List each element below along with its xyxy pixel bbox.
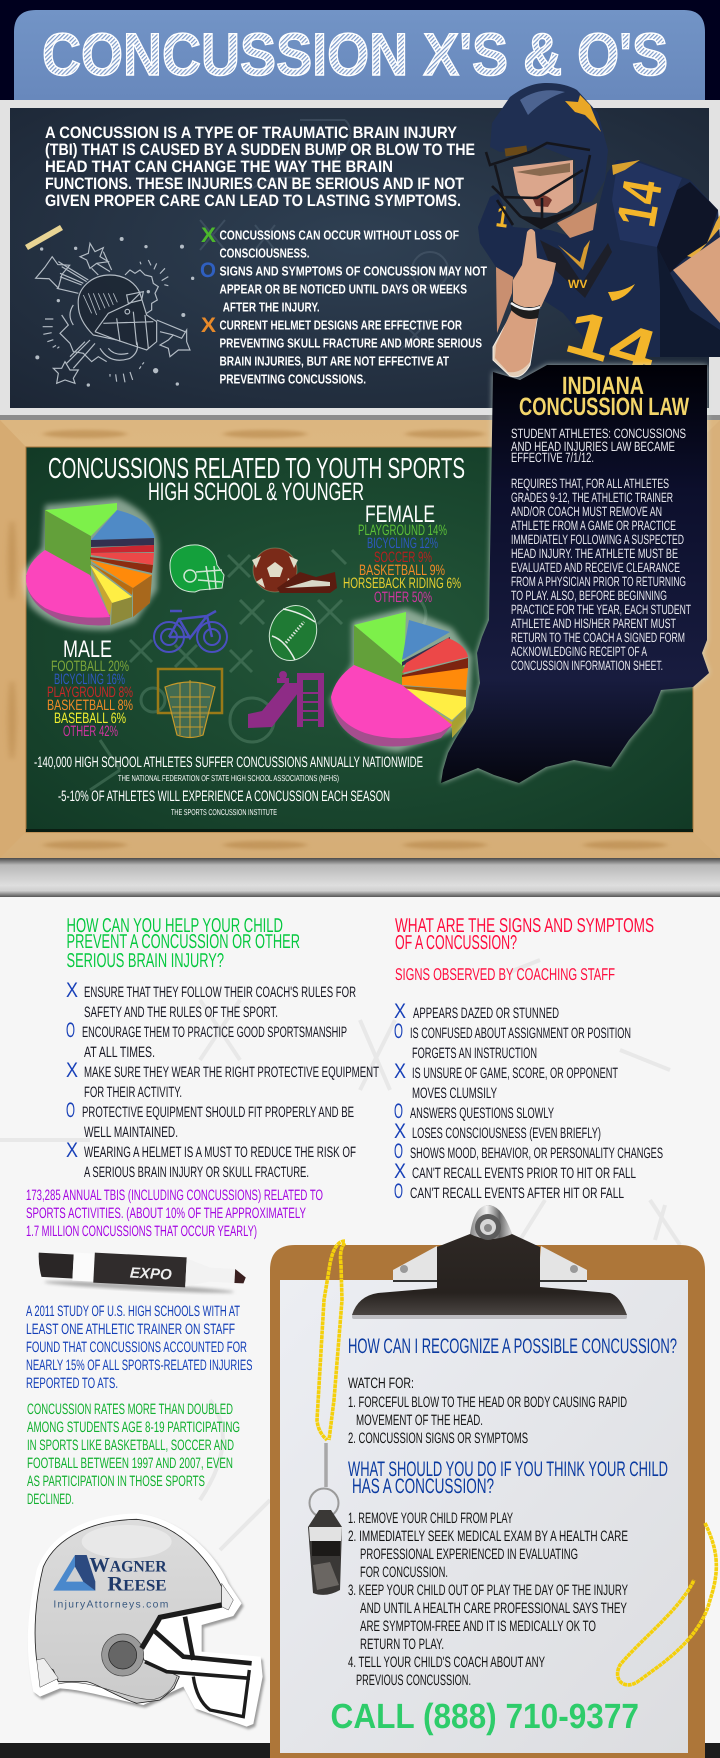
logo: Wagner Reese helmet [28, 1513, 265, 1729]
icon: chalk stick [25, 225, 63, 250]
action list: ARE SYMPTOM-FREE AND IT IS MEDICALLY OK TO [360, 1618, 596, 1635]
icon: football helmet [170, 545, 224, 592]
panel: whiteboard [0, 897, 720, 1758]
icon: american football [262, 599, 324, 667]
symptoms list: CAN'T RECALL EVENTS AFTER HIT OR FALL [410, 1185, 624, 1202]
prevention list: X [66, 1059, 78, 1082]
prevention list: SAFETY AND THE RULES OF THE SPORT. [84, 1004, 278, 1021]
prevention list: WEARING A HELMET IS A MUST TO REDUCE THE RISK OF [84, 1144, 356, 1161]
study statistic: NEARLY 15% OF ALL SPORTS-RELATED INJURIES [26, 1357, 252, 1374]
female legend [343, 522, 461, 606]
prevention list: FOR THEIR ACTIVITY. [84, 1084, 182, 1101]
recognition list: MOVEMENT OF THE HEAD. [356, 1412, 483, 1429]
football player: 14 [558, 297, 664, 388]
study statistic: A 2011 STUDY OF U.S. HIGH SCHOOLS WITH AT [26, 1303, 240, 1320]
intro bullet text: CURRENT HELMET DESIGNS ARE EFFECTIVE FOR [220, 317, 462, 332]
prevention list: O [66, 1019, 75, 1042]
football player: WV [568, 277, 587, 291]
action list: PREVIOUS CONCUSSION. [356, 1672, 471, 1689]
concussion rate statistic: AS PARTICIPATION IN THOSE SPORTS [27, 1473, 205, 1490]
intro bullet text: CONCUSSIONS CAN OCCUR WITHOUT LOSS OF [220, 227, 459, 242]
prevention list: MAKE SURE THEY WEAR THE RIGHT PROTECTIVE EQUIPMENT [84, 1064, 379, 1081]
face [513, 160, 573, 213]
concussion rate statistic: IN SPORTS LIKE BASKETBALL, SOCCER AND [27, 1437, 234, 1454]
concussion rate statistic: AMONG STUDENTS AGE 8-19 PARTICIPATING [27, 1419, 240, 1436]
concussion rate statistic [27, 1401, 240, 1508]
action list: 1. REMOVE YOUR CHILD FROM PLAY [348, 1510, 513, 1527]
male legend [47, 658, 133, 740]
faint erased marks [0, 960, 680, 1550]
football player: 1 [494, 200, 511, 235]
title: CONCUSSION X'S & O'S [42, 21, 668, 88]
prevention list: A SERIOUS BRAIN INJURY OR SKULL FRACTURE. [84, 1164, 309, 1181]
heading: what should you do [348, 1458, 668, 1498]
heading: how can you help: HOW CAN YOU HELP YOUR CHILD [66, 915, 283, 937]
prevention list: X [66, 1139, 78, 1162]
concussion rate statistic: FOOTBALL BETWEEN 1997 AND 2007, EVEN [27, 1455, 233, 1472]
whistle on yellow lanyard [308, 1241, 716, 1685]
law heading: INDIANA [562, 372, 644, 400]
call to action phone number: CALL (888) 710-9377 [330, 1697, 639, 1736]
intro bullet text: BRAIN INJURIES, BUT ARE NOT EFFECTIVE AT [220, 353, 449, 368]
symptoms list: X [394, 1120, 406, 1143]
header banner [14, 10, 705, 100]
purple TBI statistic: SPORTS ACTIVITIES. (ABOUT 10% OF THE APPROXIMATELY [26, 1205, 306, 1222]
bullet: green X: X [201, 224, 216, 247]
symptoms list: APPEARS DAZED OR STUNNED [413, 1005, 559, 1022]
heading: how can you help: SERIOUS BRAIN INJURY? [66, 950, 224, 972]
female legend: HORSEBACK RIDING 6% [343, 575, 461, 592]
female label: FEMALE [365, 501, 435, 528]
logo: Wagner Reese helmet: InjuryAttorneys.com [53, 1598, 168, 1610]
statistic: annual concussions [34, 754, 423, 783]
intro bullet text: CONSCIOUSNESS. [220, 245, 310, 260]
symptoms list: O [394, 1180, 403, 1203]
panel: Indiana law outline [441, 365, 709, 783]
purple TBI statistic: 173,285 ANNUAL TBIS (INCLUDING CONCUSSIONS) RELATED TO [26, 1187, 323, 1204]
intro text: (TBI) THAT IS CAUSED BY A SUDDEN BUMP OR BLOW TO THE [45, 141, 475, 159]
female legend: BICYCLING 12% [367, 535, 438, 552]
symptoms list: O [394, 1020, 403, 1043]
study statistic [26, 1303, 252, 1392]
female legend: SOCCER 9% [374, 549, 432, 566]
female legend: BASKETBALL 9% [359, 562, 445, 579]
law heading [519, 372, 689, 421]
bullet: orange X: X [201, 314, 216, 337]
panel: clipboard [270, 1245, 705, 1758]
panel: green chalkboard with wood frame [0, 420, 720, 858]
male legend: FOOTBALL 20% [51, 658, 129, 675]
icon: chalk helmet drawing [34, 237, 194, 387]
action list: RETURN TO PLAY. [360, 1636, 444, 1653]
action list: FOR CONCUSSION. [360, 1564, 448, 1581]
intro bullet text: PREVENTING CONCUSSIONS. [220, 371, 366, 386]
symptoms list: ANSWERS QUESTIONS SLOWLY [410, 1105, 554, 1122]
statistic: per season [58, 788, 390, 817]
panel: chalkboard intro [0, 100, 720, 420]
chart title [48, 453, 465, 506]
prevention list [66, 979, 379, 1181]
action list [348, 1510, 628, 1689]
chart title: CONCUSSIONS RELATED TO YOUTH SPORTS [48, 453, 465, 485]
heading: signs and symptoms: OF A CONCUSSION? [395, 932, 517, 954]
symptoms list: O [394, 1140, 403, 1163]
symptoms list [394, 1000, 663, 1203]
intro text: GIVEN PROPER CARE CAN LEAD TO LASTING SYMPTOMS. [45, 192, 461, 210]
logo: Wagner Reese helmet: WAGNER [89, 1554, 167, 1576]
intro bullet text: PREVENTING SKULL FRACTURE AND MORE SERIOUS [220, 335, 482, 350]
intro bullet text: APPEAR OR BE NOTICED UNTIL DAYS OR WEEKS [220, 281, 467, 296]
neck and collar [557, 203, 597, 238]
male legend: OTHER 42% [63, 723, 118, 740]
symptoms list: FORGETS AN INSTRUCTION [412, 1045, 537, 1062]
prevention list: X [66, 979, 78, 1002]
law text: EFFECTIVE 7/1/12. [511, 450, 594, 465]
icon: soccer ball and cleat [252, 548, 337, 593]
heading: signs and symptoms [395, 915, 654, 984]
chart title: HIGH SCHOOL & YOUNGER [148, 478, 364, 506]
statistic: annual concussions: -140,000 HIGH SCHOOL ATHLETES SUFFER CONCUSSIONS ANNUALLY NATIONWIDE [34, 754, 423, 771]
prevention list: PROTECTIVE EQUIPMENT SHOULD FIT PROPERLY AND BE [82, 1104, 354, 1121]
icon: playground slide [248, 671, 324, 728]
intro bullet text: AFTER THE INJURY. [223, 299, 320, 314]
symptoms list: X [394, 1160, 406, 1183]
intro bullet text: SIGNS AND SYMPTOMS OF CONCUSSION MAY NOT [220, 263, 487, 278]
symptoms list: X [394, 1000, 406, 1023]
logo: Wagner Reese helmet: REESE [107, 1573, 167, 1595]
male label: MALE [63, 636, 112, 663]
football player [478, 83, 720, 388]
law text [511, 426, 691, 673]
jersey [478, 160, 720, 357]
prevention list: O [66, 1099, 75, 1122]
clipboard clip [352, 1205, 627, 1319]
icon: dry erase marker [37, 1250, 247, 1296]
helmet [490, 83, 608, 203]
heading: how can you help: PREVENT A CONCUSSION OR OTHER [66, 931, 300, 953]
symptoms list: MOVES CLUMSILY [412, 1085, 497, 1102]
prevention list: ENSURE THAT THEY FOLLOW THEIR COACH'S RULES FOR [84, 984, 356, 1001]
icon: bicycle [154, 611, 227, 652]
recognition list: 2. CONCUSSION SIGNS OR SYMPTOMS [348, 1430, 528, 1447]
prevention list: ENCOURAGE THEM TO PRACTICE GOOD SPORTSMANSHIP [82, 1024, 347, 1041]
chalk play marks [90, 550, 426, 790]
football player: 14 [605, 175, 674, 231]
metal tray below board [0, 858, 720, 897]
wood grain [8, 430, 667, 849]
action list: 4. TELL YOUR CHILD'S COACH ABOUT ANY [348, 1654, 545, 1671]
statistic: annual concussions: THE NATIONAL FEDERATION OF STATE HIGH SCHOOL ASSOCIATIONS (NFHS) [118, 773, 339, 783]
male legend: PLAYGROUND 8% [47, 684, 133, 701]
concussion rate statistic: CONCUSSION RATES MORE THAN DOUBLED [27, 1401, 233, 1418]
intro text: HEAD THAT CAN CHANGE THE WAY THE BRAIN [45, 158, 393, 176]
pie chart: male [23, 498, 158, 630]
intro text [45, 124, 475, 210]
male legend: BASEBALL 6% [54, 710, 126, 727]
action list: PROFESSIONAL EXPERIENCED IN EVALUATING [360, 1546, 578, 1563]
face mask [486, 143, 590, 228]
female legend: PLAYGROUND 14% [358, 522, 447, 539]
intro text: A CONCUSSION IS A TYPE OF TRAUMATIC BRAIN INJURY [45, 124, 457, 142]
intro text: FUNCTIONS. THESE INJURIES CAN BE SERIOUS AND IF NOT [45, 175, 464, 193]
chalk play lines [200, 120, 448, 350]
prevention list: WELL MAINTAINED. [84, 1124, 178, 1141]
intro bullet text [220, 227, 487, 386]
icon: dry erase marker: EXPO [129, 1264, 173, 1284]
player forearm and hand [493, 229, 556, 377]
study statistic: FOUND THAT CONCUSSIONS ACCOUNTED FOR [26, 1339, 247, 1356]
heading: how can you help [66, 915, 300, 972]
bullet: blue O: O [200, 259, 216, 282]
heading: what should you do: HAS A CONCUSSION? [352, 1475, 494, 1498]
heading: signs and symptoms: SIGNS OBSERVED BY COACHING STAFF [395, 965, 615, 984]
study statistic: LEAST ONE ATHLETIC TRAINER ON STAFF [26, 1321, 235, 1338]
prevention list: AT ALL TIMES. [84, 1044, 155, 1061]
statistic: per season: -5-10% OF ATHLETES WILL EXPERIENCE A CONCUSSION EACH SEASON [58, 788, 390, 805]
male legend: BASKETBALL 8% [47, 697, 133, 714]
concussion rate statistic: DECLINED. [27, 1491, 74, 1508]
pie chart: female [330, 608, 472, 752]
study statistic: REPORTED TO ATS. [26, 1375, 118, 1392]
recognition list: WATCH FOR: [348, 1375, 414, 1392]
symptoms list: O [394, 1100, 403, 1123]
female legend: OTHER 50% [374, 589, 432, 606]
recognition list [348, 1375, 627, 1447]
male legend: BICYCLING 16% [54, 671, 125, 688]
statistic: per season: THE SPORTS CONCUSSION INSTITUTE [171, 807, 277, 817]
purple TBI statistic [26, 1187, 323, 1240]
purple TBI statistic: 1.7 MILLION CONCUSSIONS THAT OCCUR YEARLY) [26, 1223, 257, 1240]
icon: basketball hoop [158, 669, 222, 738]
symptoms list: LOSES CONSCIOUSNESS (EVEN BRIEFLY) [412, 1125, 601, 1142]
symptoms list: X [394, 1060, 406, 1083]
